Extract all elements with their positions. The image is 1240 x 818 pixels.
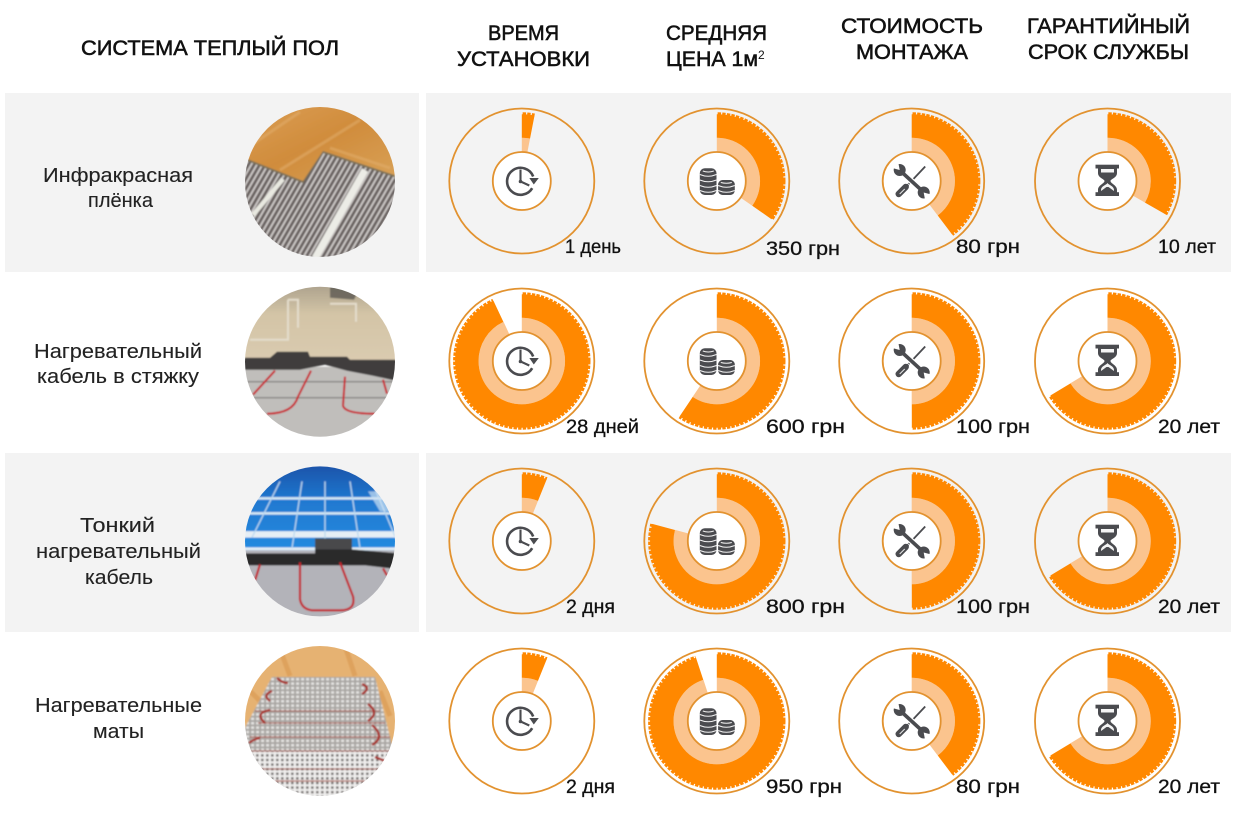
icon: clock [507,168,539,195]
value: 28 дней: 28 дней [566,417,639,438]
panel: row 1 right background [426,93,1231,272]
label: thin heating cable [36,515,201,589]
heading: installation time: УСТАНОВКИ [457,48,590,71]
chart: row 1 life, 10 years [1035,108,1180,254]
heading: average price [666,22,767,71]
heading: installation time [457,22,590,71]
value: 2 дня: 2 дня [566,597,615,618]
icon: coins [700,708,735,735]
label: heating cable in screed: Нагревательный [34,341,202,363]
chart: row 1 cost, 80 [839,108,984,254]
label: thin heating cable: Тонкий [80,515,155,537]
chart: row 4 time, 2 days [449,648,594,794]
heading: installation cost [841,15,983,64]
chart: row 4 cost, 80 [839,648,984,794]
label: infrared film: Инфракрасная [43,165,193,187]
heading: service life: ГАРАНТИЙНЫЙ [1027,14,1190,38]
label: heating mats: Нагревательные [35,695,202,717]
icon: hourglass [1096,705,1119,736]
label: heating mats: маты [93,721,144,743]
icon: clock [507,528,539,555]
chart: row 2 time, 28 days [449,288,594,434]
label: infrared film [43,165,193,212]
icon: clock [507,708,539,735]
label: infrared film: плёнка [88,190,154,212]
heading: average price: 2 [758,48,765,62]
label: thin heating cable: нагревательный [36,541,201,563]
heading: system column: СИСТЕМА ТЕПЛЫЙ ПОЛ [81,36,339,60]
value: 1 день: 1 день [565,237,621,258]
chart: row 3 cost, 100 [839,468,984,614]
photo: thin cable under tile [245,466,395,616]
value: 80 грн: 80 грн [956,237,1020,258]
heading: service life: СРОК СЛУЖБЫ [1028,41,1189,64]
icon: coins [700,528,735,555]
heading: installation cost: МОНТАЖА [856,41,968,64]
heading: installation cost: СТОИМОСТЬ [841,15,983,38]
panel: row 1 left background [5,93,419,272]
icon: tools [892,162,931,200]
chart: row 4 price, 950 [644,648,789,794]
icon: clock [507,348,539,375]
photo: cable in screed [245,286,395,437]
chart: row 2 cost, 100 [839,288,984,434]
icon: hourglass [1096,165,1119,196]
value: 10 лет: 10 лет [1158,237,1216,258]
icon: tools [892,522,931,560]
value: 20 лет: 20 лет [1158,597,1220,618]
chart: row 3 life, 20 years [1035,468,1180,614]
value: 350 грн: 350 грн [766,239,840,260]
value: 950 грн: 950 грн [766,777,842,798]
value: 600 грн: 600 грн [766,417,845,438]
photo: heating mat [245,646,395,796]
heading: average price: ЦЕНА 1м [666,48,758,71]
icon: tools [892,702,931,740]
icon: hourglass [1096,345,1119,376]
chart: row 3 price, 800 [644,468,789,614]
chart: row 3 time, 2 days [449,468,594,614]
label: heating cable in screed [34,341,202,388]
icon: coins [700,168,735,195]
value: 2 дня: 2 дня [566,777,615,798]
value: 20 лет: 20 лет [1158,777,1220,798]
photo: infrared film under wood floor [245,107,395,257]
icon: coins [700,348,735,375]
heading: average price: СРЕДНЯЯ [666,22,767,45]
label: thin heating cable: кабель [85,567,153,589]
chart: row 2 life, 20 years [1035,288,1180,434]
chart: row 2 price, 600 [644,288,789,434]
value: 80 грн: 80 грн [956,777,1020,798]
value: 20 лет: 20 лет [1158,417,1220,438]
label: heating cable in screed: кабель в стяжку [37,366,199,388]
chart: row 1 price, 350 [644,108,789,254]
panel: row 3 right background [426,453,1231,632]
chart: row 4 life, 20 years [1035,648,1180,794]
heading: installation time: ВРЕМЯ [488,22,559,45]
panel: row 3 left background [5,453,419,632]
icon: tools [892,342,931,380]
label: heating mats [35,695,202,743]
value: 100 грн: 100 грн [956,597,1030,618]
heading: service life [1027,14,1190,64]
chart: row 1 time, 1 day [449,108,594,254]
value: 800 грн: 800 грн [766,597,845,618]
value: 100 грн: 100 грн [956,417,1030,438]
icon: hourglass [1096,525,1119,556]
